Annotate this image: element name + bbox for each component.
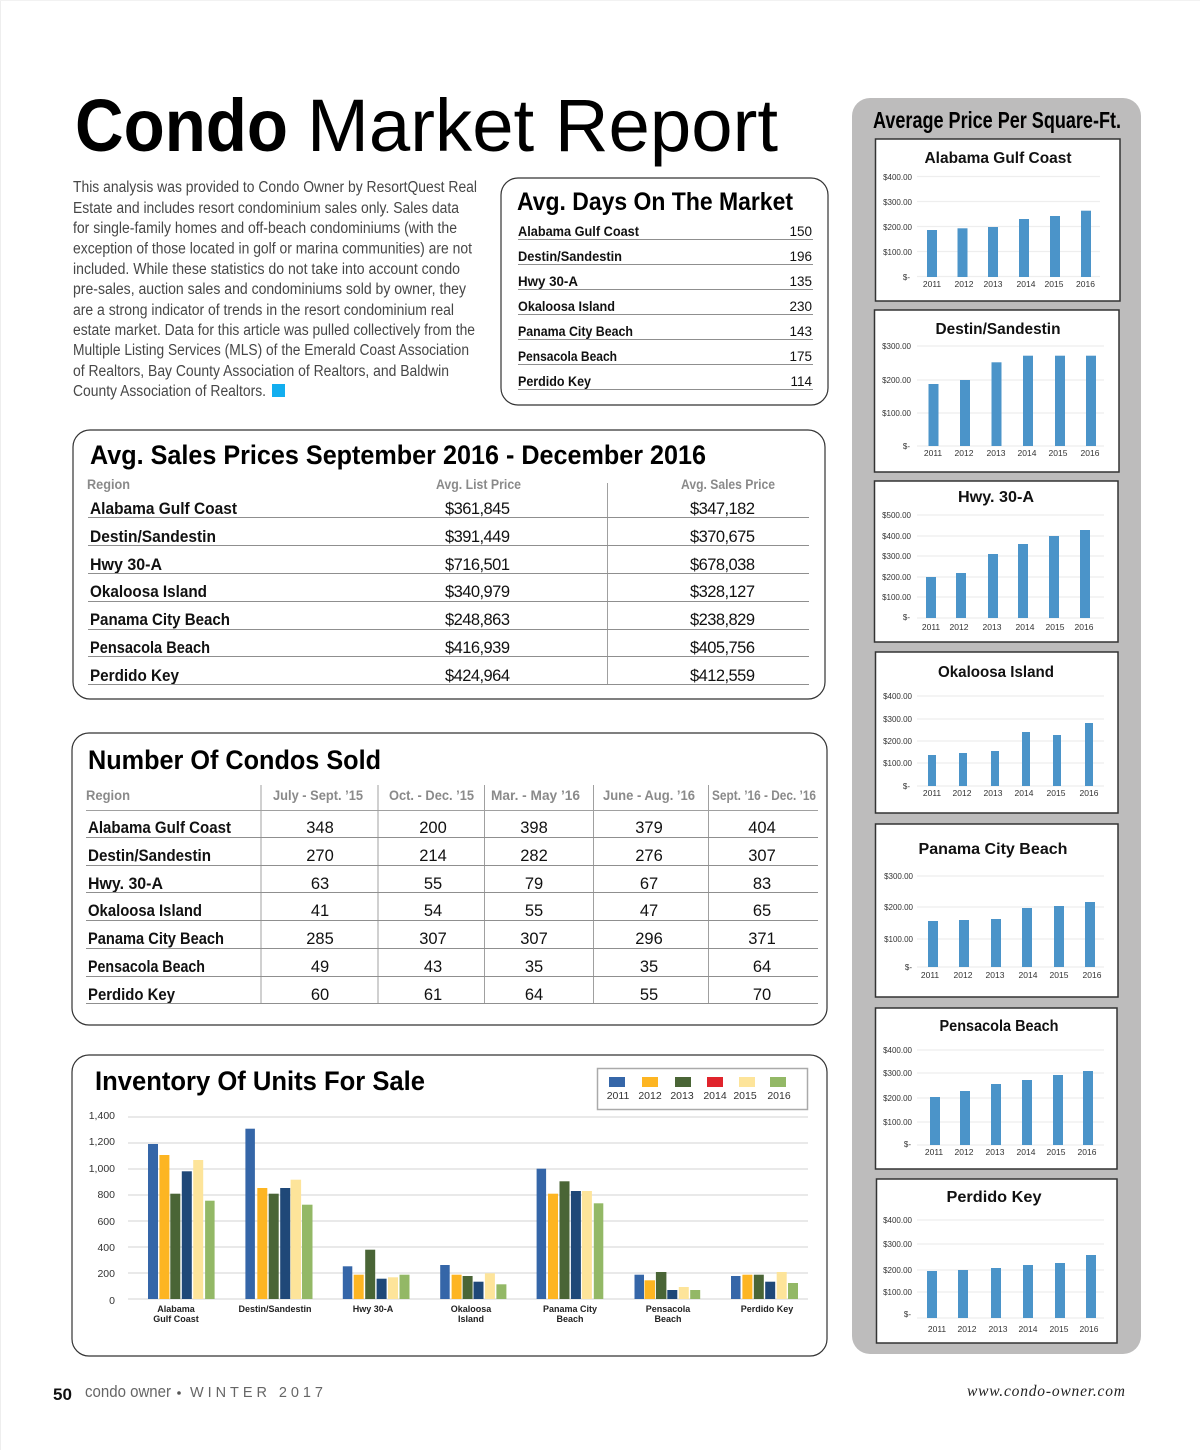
chart legend: 2016: [767, 1090, 791, 1102]
intro text block: County Association of Realtors.: [73, 383, 266, 400]
footer: page number and issue: [53, 1383, 323, 1404]
sales table rows: $361,845: [445, 500, 510, 518]
condos table rows: 35: [525, 958, 543, 976]
chart: Pensacola Beach: $300.00: [883, 1069, 913, 1078]
chart: Destin/Sandestin: 2012: [955, 448, 974, 458]
intro text block: included. While these statistics do not take into account condo: [73, 261, 460, 278]
intro text block: exception of those located in golf or marina communities) are not: [73, 240, 473, 258]
chart: Panama City Beach: [876, 824, 1118, 997]
category labels: Gulf Coast: [153, 1314, 199, 1324]
condos table rows: 307: [520, 930, 548, 948]
condos table rows: 54: [424, 902, 442, 920]
chart: Alabama Gulf Coast: 2015: [1045, 279, 1064, 289]
intro text block: of Realtors, Bay County Association of Realtors, and Baldwin: [73, 363, 449, 380]
intro text block: [73, 179, 477, 400]
intro text block: Multiple Listing Services (MLS) of the Emerald Coast Association: [73, 342, 469, 359]
chart: Perdido Key: 2013: [989, 1324, 1008, 1334]
condos table rows: 61: [424, 986, 442, 1004]
chart: Alabama Gulf Coast: [876, 139, 1120, 301]
sales table rows: $391,449: [445, 528, 510, 546]
chart: Alabama Gulf Coast: $100.00: [883, 248, 913, 257]
chart: Okaloosa Island: $100.00: [883, 759, 913, 768]
chart: Alabama Gulf Coast: $400.00: [883, 173, 913, 182]
chart: Okaloosa Island: 2014: [1015, 788, 1034, 798]
footer: page number and issue: WINTER 2017: [190, 1385, 323, 1401]
days rows: Panama City Beach: [518, 324, 633, 339]
sales table rows: $328,127: [690, 583, 755, 601]
chart: Okaloosa Island: 2015: [1047, 788, 1066, 798]
days rows: 114: [790, 374, 812, 389]
chart: Hwy. 30-A: 2012: [950, 622, 969, 632]
title: Condo: [75, 84, 288, 167]
days rows: Perdido Key: [518, 374, 591, 389]
sales table rows: Pensacola Beach: [90, 639, 210, 657]
condos table header: Region: [86, 788, 130, 803]
sales table rows: Okaloosa Island: [90, 583, 207, 601]
category labels: Pensacola: [646, 1304, 691, 1314]
chart: Perdido Key: 2016: [1080, 1324, 1099, 1334]
chart legend: [598, 1068, 808, 1110]
condos table rows: 63: [311, 875, 329, 893]
chart: Perdido Key: [876, 1179, 1117, 1343]
footer: page number and issue: condo owner: [85, 1383, 171, 1401]
condos table rows: 307: [748, 847, 776, 865]
days rows: 135: [789, 274, 812, 289]
chart: Hwy. 30-A: 2013: [983, 622, 1002, 632]
category labels: Alabama: [157, 1304, 196, 1314]
condos table header: Mar. - May ’16: [491, 788, 580, 803]
sales table rows: Panama City Beach: [90, 611, 230, 629]
chart: Hwy. 30-A: 2015: [1046, 622, 1065, 632]
heading: inventory of units: Inventory Of Units For Sale: [95, 1066, 425, 1096]
chart legend: 2012: [638, 1090, 662, 1102]
chart: Hwy. 30-A: $400.00: [882, 532, 912, 541]
chart: Destin/Sandestin: 2013: [987, 448, 1006, 458]
condos table rows: 214: [419, 847, 447, 865]
sales table header: Avg. Sales Price: [681, 477, 775, 492]
bars: Panama City Beach: [537, 1169, 603, 1299]
chart: Okaloosa Island: 2012: [953, 788, 972, 798]
chart: Destin/Sandestin: $100.00: [882, 409, 912, 418]
chart: Alabama Gulf Coast: $300.00: [883, 198, 913, 207]
bar chart: inventory: 600: [97, 1216, 115, 1228]
bar chart: inventory: 1,000: [89, 1163, 115, 1175]
chart: Pensacola Beach: $200.00: [883, 1094, 913, 1103]
chart: Pensacola Beach: Pensacola Beach: [940, 1018, 1058, 1035]
sales table rows: $370,675: [690, 528, 755, 546]
chart: Pensacola Beach: $400.00: [883, 1046, 913, 1055]
sales table header: Region: [87, 477, 130, 492]
bars: Hwy 30-A: [343, 1250, 410, 1299]
category labels: [153, 1304, 793, 1324]
condos table rows: 47: [640, 902, 658, 920]
category labels: Beach: [654, 1314, 682, 1324]
condos table rows: 307: [419, 930, 447, 948]
condos table rows: Perdido Key: [88, 986, 176, 1004]
condos table rows: 49: [311, 958, 329, 976]
sales table rows: Destin/Sandestin: [90, 528, 216, 546]
days rows: Destin/Sandestin: [518, 249, 622, 264]
condos table rows: 404: [748, 819, 776, 837]
chart: Destin/Sandestin: Destin/Sandestin: [936, 321, 1060, 338]
chart: Pensacola Beach: [876, 1008, 1117, 1169]
chart: Pensacola Beach: 2016: [1078, 1147, 1097, 1157]
sales table rows: Hwy 30-A: [90, 556, 162, 574]
chart: Okaloosa Island: 2011: [923, 788, 941, 798]
chart: Alabama Gulf Coast: $-: [903, 273, 910, 282]
condos table rows: 64: [753, 958, 771, 976]
sales table rows: $424,964: [445, 667, 510, 685]
chart: Hwy. 30-A: $200.00: [882, 573, 912, 582]
category labels: Destin/Sandestin: [238, 1304, 312, 1314]
sidebar heading: Average Price Per Square-Ft.: [873, 107, 1121, 133]
chart: Perdido Key: $200.00: [883, 1266, 913, 1275]
condos table rows: 35: [640, 958, 658, 976]
bar chart: inventory: 0: [109, 1295, 115, 1307]
chart: Okaloosa Island: 2013: [984, 788, 1003, 798]
chart legend: 2015: [733, 1090, 757, 1102]
sales table rows: $405,756: [690, 639, 755, 657]
chart: Hwy. 30-A: Hwy. 30-A: [958, 489, 1034, 506]
condos table rows: 276: [635, 847, 663, 865]
chart: Hwy. 30-A: $100.00: [882, 593, 912, 602]
chart: Perdido Key: $300.00: [883, 1240, 913, 1249]
intro text block: are a strong indicator of trends in the resort condominium real: [73, 302, 454, 319]
chart: Destin/Sandestin: $-: [903, 442, 910, 451]
chart: Alabama Gulf Coast: 2016: [1076, 279, 1095, 289]
chart: Panama City Beach: 2015: [1050, 970, 1069, 980]
chart: Okaloosa Island: [876, 652, 1118, 813]
panel: avg sales prices: [73, 430, 825, 699]
chart: Panama City Beach: 2014: [1019, 970, 1038, 980]
chart: Panama City Beach: $-: [905, 963, 912, 972]
condos table rows: 379: [635, 819, 663, 837]
condos table rows: 41: [311, 902, 329, 920]
footer: website: www.condo-owner.com: [967, 1383, 1125, 1400]
condos table rows: 296: [635, 930, 663, 948]
condos table rows: 64: [525, 986, 543, 1004]
condos table rows: 83: [753, 875, 771, 893]
chart: Destin/Sandestin: $200.00: [882, 376, 912, 385]
category labels: Hwy 30-A: [353, 1304, 394, 1314]
chart legend: 2014: [703, 1090, 727, 1102]
chart: Alabama Gulf Coast: 2014: [1017, 279, 1036, 289]
bar chart: inventory: 1,200: [89, 1136, 115, 1148]
chart: Okaloosa Island: 2016: [1080, 788, 1099, 798]
intro text block: Estate and includes resort condominium sales only. Sales data: [73, 200, 459, 217]
chart: Panama City Beach: 2012: [954, 970, 973, 980]
condos table rows: 55: [640, 986, 658, 1004]
condos table rows: 65: [753, 902, 771, 920]
chart: Panama City Beach: 2013: [986, 970, 1005, 980]
chart: Destin/Sandestin: 2011: [924, 448, 942, 458]
chart: Pensacola Beach: 2012: [955, 1147, 974, 1157]
chart: Hwy. 30-A: $-: [903, 613, 910, 622]
condos table rows: 43: [424, 958, 442, 976]
chart: Okaloosa Island: $400.00: [883, 692, 913, 701]
condos table rows: 67: [640, 875, 658, 893]
days rows: [518, 224, 813, 390]
chart: Destin/Sandestin: 2015: [1049, 448, 1068, 458]
chart: Perdido Key: 2015: [1050, 1324, 1069, 1334]
condos table rows: 200: [419, 819, 447, 837]
chart: Destin/Sandestin: 2014: [1018, 448, 1037, 458]
intro text block: This analysis was provided to Condo Owner by ResortQuest Real: [73, 179, 477, 196]
chart legend: 2013: [670, 1090, 694, 1102]
chart: Panama City Beach: 2016: [1083, 970, 1102, 980]
condos table rows: 60: [311, 986, 329, 1004]
chart: Alabama Gulf Coast: Alabama Gulf Coast: [924, 150, 1072, 167]
title: Market Report: [307, 84, 778, 167]
condos table rows: 371: [748, 930, 776, 948]
chart legend: 2011: [607, 1090, 629, 1102]
sales table header: Avg. List Price: [436, 477, 521, 492]
condos table rows: 398: [520, 819, 548, 837]
condos table rows: 348: [306, 819, 334, 837]
chart: Alabama Gulf Coast: 2012: [955, 279, 974, 289]
heading: number of condos sold: Number Of Condos Sold: [88, 745, 381, 775]
chart: Perdido Key: $-: [904, 1310, 911, 1319]
condos table rows: Hwy. 30-A: [88, 875, 163, 893]
sales table rows: Alabama Gulf Coast: [90, 500, 237, 518]
sales table rows: $716,501: [445, 556, 510, 574]
chart: Hwy. 30-A: $500.00: [882, 511, 912, 520]
panel: inventory of units for sale: [72, 1055, 827, 1356]
condos table header: Sept. ’16 - Dec. ’16: [712, 788, 816, 803]
condos table rows: Alabama Gulf Coast: [88, 819, 231, 837]
bars: Okaloosa Island: [440, 1265, 506, 1299]
chart: Alabama Gulf Coast: 2011: [923, 279, 941, 289]
chart: Hwy. 30-A: 2014: [1016, 622, 1035, 632]
chart: Destin/Sandestin: 2016: [1081, 448, 1100, 458]
bars: Destin/Sandestin: [245, 1129, 312, 1299]
days rows: 150: [789, 224, 812, 239]
days rows: Pensacola Beach: [518, 349, 617, 364]
days rows: Hwy 30-A: [518, 274, 578, 289]
chart: Panama City Beach: Panama City Beach: [918, 841, 1068, 858]
category labels: Beach: [556, 1314, 584, 1324]
chart: Pensacola Beach: 2011: [925, 1147, 943, 1157]
chart: Okaloosa Island: $300.00: [883, 715, 913, 724]
condos table rows: Panama City Beach: [88, 930, 224, 948]
condos table rows: 282: [520, 847, 548, 865]
condos table rows: 70: [753, 986, 771, 1004]
chart: Pensacola Beach: 2015: [1047, 1147, 1066, 1157]
chart: Okaloosa Island: $200.00: [883, 737, 913, 746]
bar chart: inventory: 400: [97, 1242, 115, 1254]
days rows: 143: [789, 324, 812, 339]
chart: Okaloosa Island: $-: [903, 782, 910, 791]
sales table header: [87, 477, 775, 492]
days rows: 196: [789, 249, 812, 264]
sales table rows: $678,038: [690, 556, 755, 574]
condos table rows: 285: [306, 930, 334, 948]
condos table rows: 55: [424, 875, 442, 893]
heading: avg days on the market: Avg. Days On The Market: [517, 188, 794, 216]
chart: Alabama Gulf Coast: $200.00: [883, 223, 913, 232]
chart: Panama City Beach: 2011: [921, 970, 939, 980]
sales table rows: [88, 483, 809, 685]
condos table rows: 270: [306, 847, 334, 865]
chart: Panama City Beach: $200.00: [884, 903, 914, 912]
chart: Hwy. 30-A: 2016: [1075, 622, 1094, 632]
days rows: 230: [789, 299, 812, 314]
condos table header: July - Sept. ’15: [273, 788, 363, 803]
condos table rows: 79: [525, 875, 543, 893]
intro text block: pre-sales, auction sales and condominiums sold by owner, they: [73, 281, 466, 298]
chart: Perdido Key: 2014: [1019, 1324, 1038, 1334]
days rows: Okaloosa Island: [518, 299, 615, 314]
category labels: Perdido Key: [741, 1304, 793, 1314]
title: [75, 84, 778, 167]
condos table rows: [86, 785, 818, 1004]
chart: Hwy. 30-A: $300.00: [882, 552, 912, 561]
sales table rows: $416,939: [445, 639, 510, 657]
chart: Perdido Key: 2011: [928, 1324, 946, 1334]
chart: Perdido Key: 2012: [958, 1324, 977, 1334]
chart: Destin/Sandestin: $300.00: [882, 342, 912, 351]
condos table header: Oct. - Dec. ’15: [389, 788, 474, 803]
condos table header: [86, 788, 818, 810]
sales table rows: $340,979: [445, 583, 510, 601]
chart: Hwy. 30-A: 2011: [922, 622, 940, 632]
chart: Okaloosa Island: Okaloosa Island: [938, 664, 1054, 681]
chart: Destin/Sandestin: [874, 310, 1119, 472]
chart: Pensacola Beach: 2013: [986, 1147, 1005, 1157]
bar chart: inventory: 200: [97, 1268, 115, 1280]
chart: Hwy. 30-A: [874, 481, 1118, 642]
chart: Perdido Key: Perdido Key: [946, 1189, 1042, 1206]
days rows: 175: [789, 349, 812, 364]
category labels: Okaloosa: [451, 1304, 492, 1314]
heading: avg sales prices: Avg. Sales Prices September 2016 - December 2016: [90, 440, 706, 470]
chart: Pensacola Beach: 2014: [1017, 1147, 1036, 1157]
chart: Pensacola Beach: $-: [904, 1140, 911, 1149]
condos table rows: Pensacola Beach: [88, 958, 205, 976]
category labels: Island: [458, 1314, 484, 1324]
footer: page number and issue: 50: [53, 1385, 72, 1404]
condos table rows: 55: [525, 902, 543, 920]
chart: Panama City Beach: $300.00: [884, 872, 914, 881]
sales table rows: $347,182: [690, 500, 755, 518]
category labels: Panama City: [543, 1304, 597, 1314]
bar chart: inventory: 1,400: [89, 1110, 115, 1122]
condos table header: June - Aug. ’16: [603, 788, 695, 803]
bars: Perdido Key: [731, 1272, 798, 1299]
sales table rows: $248,863: [445, 611, 510, 629]
chart: Perdido Key: $100.00: [883, 1288, 913, 1297]
condos table rows: Destin/Sandestin: [88, 847, 211, 865]
chart: Alabama Gulf Coast: 2013: [984, 279, 1003, 289]
days rows: Alabama Gulf Coast: [518, 224, 639, 239]
chart: Panama City Beach: $100.00: [884, 935, 914, 944]
panel: average price per square-ft: [852, 98, 1141, 1354]
sales table rows: $238,829: [690, 611, 755, 629]
bar chart: inventory: [89, 1110, 808, 1324]
condos table rows: Okaloosa Island: [88, 902, 202, 920]
panel: avg days on the market: [501, 178, 828, 405]
panel: number of condos sold: [72, 733, 827, 1025]
intro text block: estate market. Data for this article was pulled collectively from the: [73, 322, 475, 339]
sales table rows: Perdido Key: [90, 667, 180, 685]
sales table rows: $412,559: [690, 667, 755, 685]
chart: Pensacola Beach: $100.00: [883, 1118, 913, 1127]
bars: Pensacola Beach: [634, 1272, 700, 1299]
bar chart: inventory: 800: [97, 1189, 115, 1201]
intro text block: for single-family homes and off-beach condominiums (with the: [73, 220, 457, 237]
chart: Perdido Key: $400.00: [883, 1216, 913, 1225]
bars: Alabama Gulf Coast: [148, 1144, 215, 1299]
